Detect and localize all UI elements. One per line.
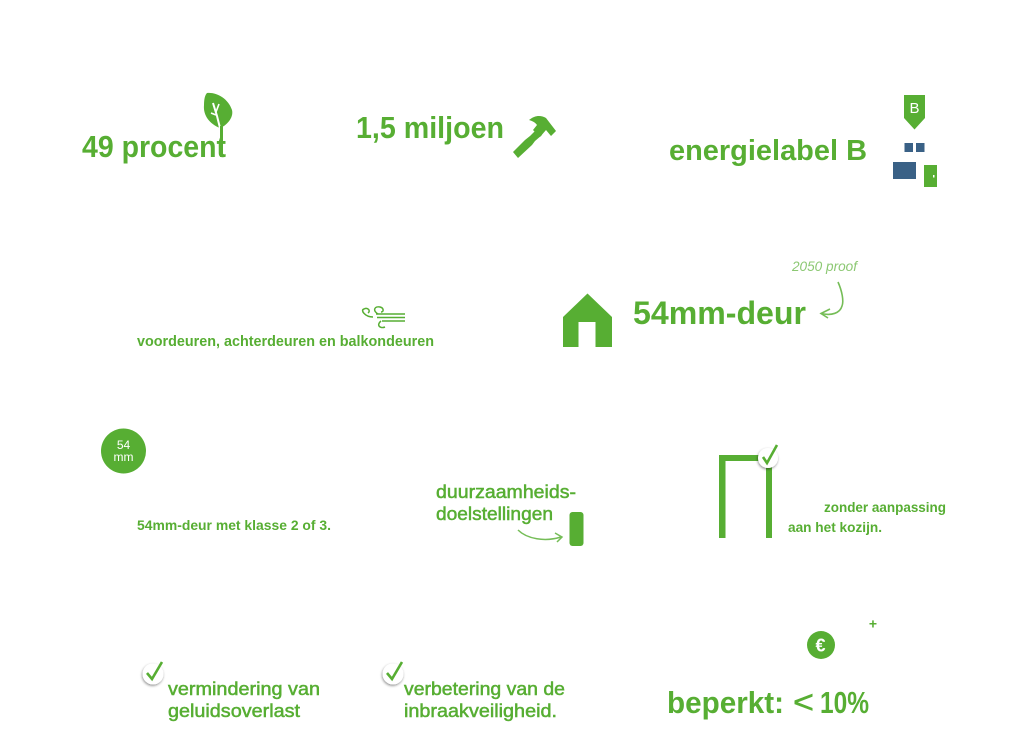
- text: no frame modification: [788, 499, 946, 535]
- icon: check noise: [142, 662, 164, 684]
- text: no frame modification: aan het kozijn.: [788, 519, 882, 535]
- text: sustainability goals: [436, 482, 576, 524]
- icon: wind: [363, 307, 405, 328]
- text: noise reduction: vermindering van: [168, 679, 320, 699]
- heading: 49 procent: 49 procent: [82, 129, 226, 164]
- icon: leaf: [204, 93, 232, 157]
- text: burglary safety: [404, 679, 565, 721]
- icon: euro: €: [815, 636, 826, 656]
- heading: beperkt < 10%: <: [793, 684, 814, 720]
- badge: 54 mm: mm: [114, 450, 134, 464]
- handwritten note: 2050 proof: 2050 proof: [791, 258, 859, 274]
- arrow: note to 54mm-deur: [821, 282, 843, 318]
- icon: energy label B house: [893, 95, 937, 187]
- text: door types: voordeuren, achterdeuren en balkondeuren: [137, 334, 434, 350]
- heading: beperkt < 10%: [667, 684, 869, 720]
- heading: energielabel B: energielabel B: [669, 135, 867, 167]
- icon: door: [570, 512, 584, 546]
- heading: beperkt < 10%: beperkt:: [667, 685, 784, 720]
- text: no frame modification: zonder aanpassing: [824, 499, 946, 515]
- badge: 54 mm: [101, 428, 146, 474]
- heading: 1,5 miljoen: 1,5 miljoen: [356, 110, 504, 145]
- windows: [893, 143, 924, 179]
- text: door class: 54mm-deur met klasse 2 of 3.: [137, 517, 331, 533]
- icon: door frame: [719, 455, 772, 538]
- icon: euro: [807, 631, 835, 659]
- heading: 54mm-deur: 54mm-deur: [633, 295, 806, 331]
- label tag: B: [909, 100, 920, 117]
- icon: check burglary: [382, 662, 404, 684]
- icon: house: [563, 294, 612, 347]
- text: noise reduction: [168, 679, 320, 721]
- text: sustainability goals: doelstellingen: [436, 504, 553, 524]
- arrow: goals to door: [518, 530, 562, 542]
- icon: hammer: [513, 116, 556, 158]
- text: sustainability goals: duurzaamheids-: [436, 482, 576, 502]
- text: burglary safety: verbetering van de: [404, 679, 565, 699]
- text: burglary safety: inbraakveiligheid.: [404, 701, 557, 721]
- text: noise reduction: geluidsoverlast: [168, 701, 300, 721]
- icon: plus: +: [869, 616, 877, 632]
- icon: frame check: [758, 445, 778, 468]
- door: [924, 165, 937, 187]
- badge: 54 mm: 54: [117, 438, 130, 452]
- heading: beperkt < 10%: 10%: [820, 685, 869, 720]
